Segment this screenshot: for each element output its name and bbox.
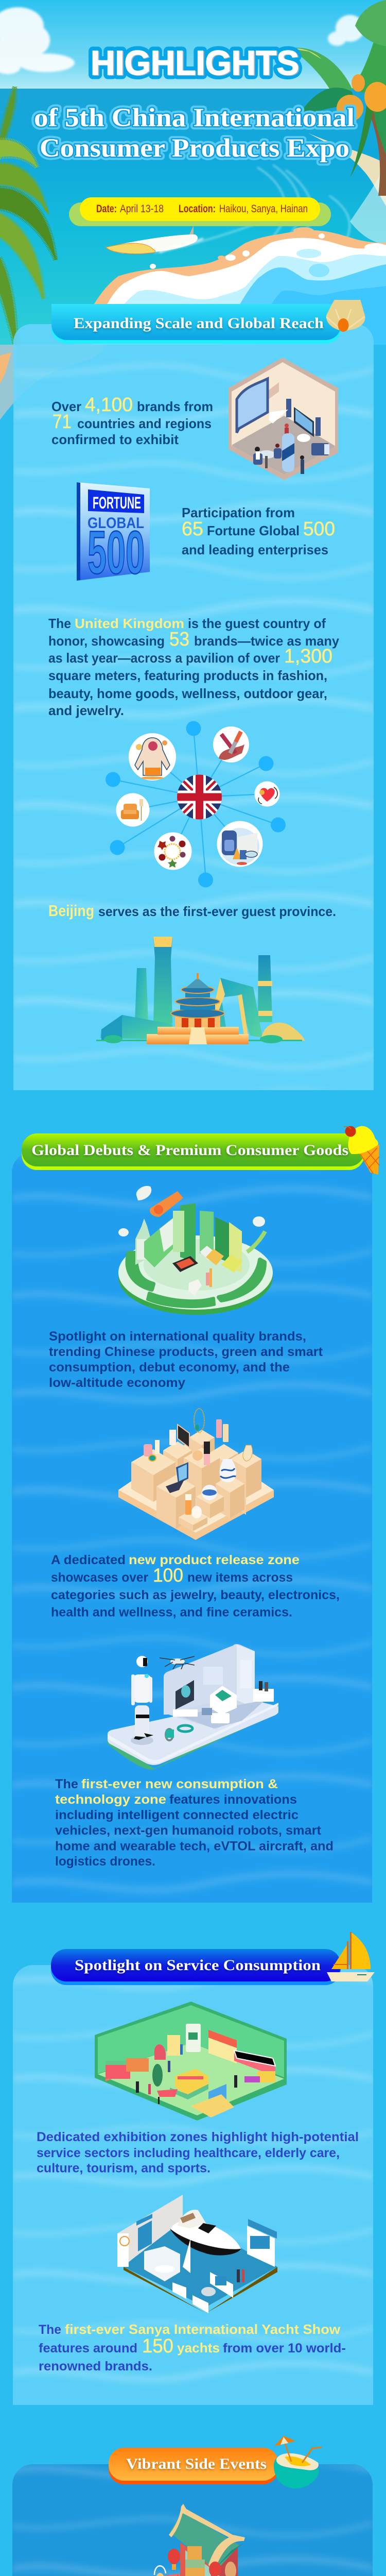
cloud right (328, 15, 364, 46)
text: dedicated exhibition zones (37, 2130, 359, 2175)
text: new consumption and technology zone: logistics drones. (55, 1854, 155, 1869)
text: Fortune Global 500 participation (182, 505, 335, 557)
text: new product release zone: showcases over (51, 1570, 148, 1585)
text: new consumption and technology zone: features innovations (169, 1792, 297, 1807)
text: 4,100 brands: Over (51, 399, 81, 414)
heading: Spotlight on Service Consumption: Spotlight on Service Consumption (75, 1957, 321, 1974)
text: new consumption and technology zone: home and wearable tech, eVTOL aircraft, and (55, 1839, 334, 1854)
icon: hoodie (fashion) (129, 733, 176, 781)
text: dedicated exhibition zones: culture, tourism, and sports. (37, 2161, 210, 2175)
icon: sailboat (327, 1932, 375, 1981)
foam right (350, 175, 386, 245)
title line: HIGHLIGHTS: HIGHLIGHTS (91, 44, 299, 82)
text: new consumption and technology zone: technology zone (55, 1792, 166, 1807)
main title: HIGHLIGHTS (91, 44, 299, 82)
date and location pill: April 13-18 (120, 203, 164, 215)
panel: vibrant side events (12, 2464, 373, 2576)
text: dedicated exhibition zones: service sectors including healthcare, elderly care, (37, 2146, 340, 2160)
icon: ice cream cone (344, 1126, 379, 1175)
text: Beijing guest province: Beijing (48, 902, 94, 920)
text: spotlight on international brands: consumption, debut economy, and the (49, 1360, 290, 1375)
text: Fortune Global 500 participation: Fortune Global (207, 523, 300, 538)
text: Sanya yacht show: first-ever Sanya International Yacht Show (65, 2321, 341, 2337)
text: new consumption and technology zone: including intelligent connected electric (55, 1808, 299, 1822)
illustration: pedestals with new products (118, 1409, 274, 1540)
illustration: green round showcase (118, 1186, 273, 1315)
surfboard (106, 226, 203, 254)
icon: backpack and map (outdoor) (217, 821, 262, 867)
main title: of 5th China International (34, 104, 355, 132)
text: 4,100 brands: 71 (52, 411, 72, 433)
icon: seashell (326, 300, 365, 332)
diagram: UK hub and product categories (106, 721, 286, 887)
text: United Kingdom guest country: The (48, 616, 71, 631)
text: United Kingdom guest country: square meters, featuring products in fashion, (48, 668, 327, 683)
text: Sanya yacht show: The (39, 2323, 61, 2337)
text: United Kingdom guest country: brands—twice as many (194, 633, 340, 649)
text: Sanya yacht show: features around (39, 2341, 137, 2355)
text: 4,100 brands: brands from (137, 399, 213, 414)
text: Fortune Global 500 participation: 500 (303, 518, 335, 540)
text: United Kingdom guest country: United Kingdom (75, 616, 184, 631)
text: new consumption and technology zone: The (55, 1777, 78, 1791)
title line: Consumer Products Expo: Consumer Products Expo (40, 134, 349, 163)
illustration: green service exhibition hall (95, 2002, 287, 2121)
heading: Global Debuts and Premium Consumer Goods: Global Debuts & Premium Consumer Goods (31, 1142, 348, 1159)
illustration: yacht show hall (117, 2195, 277, 2313)
text: Sanya yacht show: yachts (177, 2340, 220, 2355)
sky (0, 6, 374, 89)
text: 4,100 brands: 4,100 (85, 394, 133, 416)
text: Beijing guest province (48, 902, 336, 920)
heading: Global Debuts and Premium Consumer Goods (22, 1133, 364, 1170)
main title: Consumer Products Expo (40, 134, 349, 163)
text: new consumption and technology zone: vehicles, next-gen humanoid robots, smart (55, 1823, 322, 1838)
illustration: exhibition booth (229, 358, 338, 480)
date and location pill: Location: (179, 203, 216, 215)
text: United Kingdom guest country (48, 616, 340, 718)
text: United Kingdom guest country: and jewelry. (48, 703, 124, 718)
text: new product release zone: health and wellness, and fine ceramics. (51, 1605, 292, 1620)
text: Sanya yacht show: from over 10 world- (223, 2341, 346, 2355)
text: United Kingdom guest country: is the guest country of (188, 616, 326, 631)
heading: Vibrant Side Events (109, 2448, 278, 2484)
text: United Kingdom guest country: honor, showcasing (48, 633, 165, 649)
text: United Kingdom guest country: 53 (169, 629, 189, 650)
palm left (0, 87, 56, 350)
text: Sanya yacht show: renowned brands. (39, 2359, 152, 2374)
text: new product release zone (51, 1553, 340, 1620)
text: United Kingdom guest country: beauty, home goods, wellness, outdoor gear, (48, 686, 327, 701)
panel: global debuts and premium consumer goods (12, 1152, 372, 1903)
text: new product release zone: new items across (187, 1570, 293, 1585)
text: 4,100 brands: countries and regions (77, 416, 212, 431)
heading: Expanding Scale and Global Reach (51, 304, 341, 344)
panel: spotlight on service consumption (13, 1965, 373, 2405)
icon: heart and stethoscope (wellness) (254, 781, 280, 807)
text: new product release zone: categories such as jewelry, beauty, electronics, (51, 1588, 340, 1602)
icon: lipsticks (beauty) (213, 726, 249, 762)
text: United Kingdom guest country: as last year—across a pavilion of over (48, 650, 280, 666)
beach remnant below hero (0, 345, 103, 420)
illustration: robot and smart home platform (108, 1644, 278, 1770)
heading: Vibrant Side Events: Vibrant Side Events (126, 2455, 267, 2472)
text: Fortune Global 500 participation: 65 (182, 518, 203, 540)
icon: coconut drink (274, 2436, 322, 2488)
illustration: Fortune Global 500 cover: GLOBAL (87, 515, 144, 532)
sea (0, 89, 386, 346)
main title: Consumer Products Expo (40, 134, 349, 163)
illustration: Fortune Global 500 cover: 500 (87, 519, 145, 587)
text: Fortune Global 500 participation: Participation from (182, 505, 295, 520)
text: new consumption and technology zone: first-ever new consumption & (81, 1777, 278, 1791)
heading: Expanding Scale and Global Reach: Expanding Scale and Global Reach (74, 315, 324, 332)
text: spotlight on international brands: Spotlight on international quality brands, (49, 1329, 306, 1344)
date and location pill (69, 197, 331, 226)
text: new product release zone: A dedicated (51, 1553, 126, 1567)
illustration: Fortune Global 500 cover: FORTUNE (93, 494, 141, 512)
title line: of 5th China International: of 5th China International (34, 104, 355, 132)
main title: HIGHLIGHTS (92, 44, 300, 83)
text: Fortune Global 500 participation: and leading enterprises (182, 542, 328, 557)
icon: armchair (home goods) (116, 793, 149, 826)
text: spotlight on international brands: trending Chinese products, green and smart (49, 1345, 323, 1359)
illustration: Beijing skyline (96, 937, 305, 1044)
date and location pill: Haikou, Sanya, Hainan (219, 203, 308, 215)
text: 4,100 brands: confirmed to exhibit (51, 432, 179, 447)
illustration: shopping gate and cart (148, 2504, 245, 2576)
main title (34, 44, 355, 163)
text: Sanya yacht show (39, 2321, 346, 2374)
text: Sanya yacht show: 150 (142, 2335, 173, 2357)
text: Beijing guest province: serves as the first-ever guest province. (98, 904, 336, 919)
text: United Kingdom guest country: 1,300 (284, 646, 332, 667)
text: new product release zone: 100 (153, 1565, 183, 1586)
text: new product release zone: new product release zone (129, 1553, 300, 1567)
icon: jewelry bracelet (154, 833, 191, 870)
text: 4,100 brands (51, 394, 213, 447)
text: spotlight on international brands: low-altitude economy (49, 1376, 185, 1390)
text: spotlight on international brands (49, 1329, 323, 1390)
palm right (289, 0, 386, 196)
shore wave layers (74, 227, 386, 346)
hero scene (0, 0, 386, 350)
text: dedicated exhibition zones: Dedicated exhibition zones highlight high-potential (37, 2130, 359, 2144)
cloud left (0, 7, 75, 74)
main title: of 5th China International (34, 104, 355, 132)
date and location pill: Date: (96, 203, 117, 215)
beach right (308, 133, 386, 206)
illustration: Fortune Global 500 cover (77, 482, 150, 587)
heading: Spotlight on Service Consumption (51, 1949, 341, 1985)
water ripples (153, 163, 352, 255)
text: new consumption and technology zone (55, 1777, 334, 1869)
icon: UK flag (177, 775, 222, 819)
